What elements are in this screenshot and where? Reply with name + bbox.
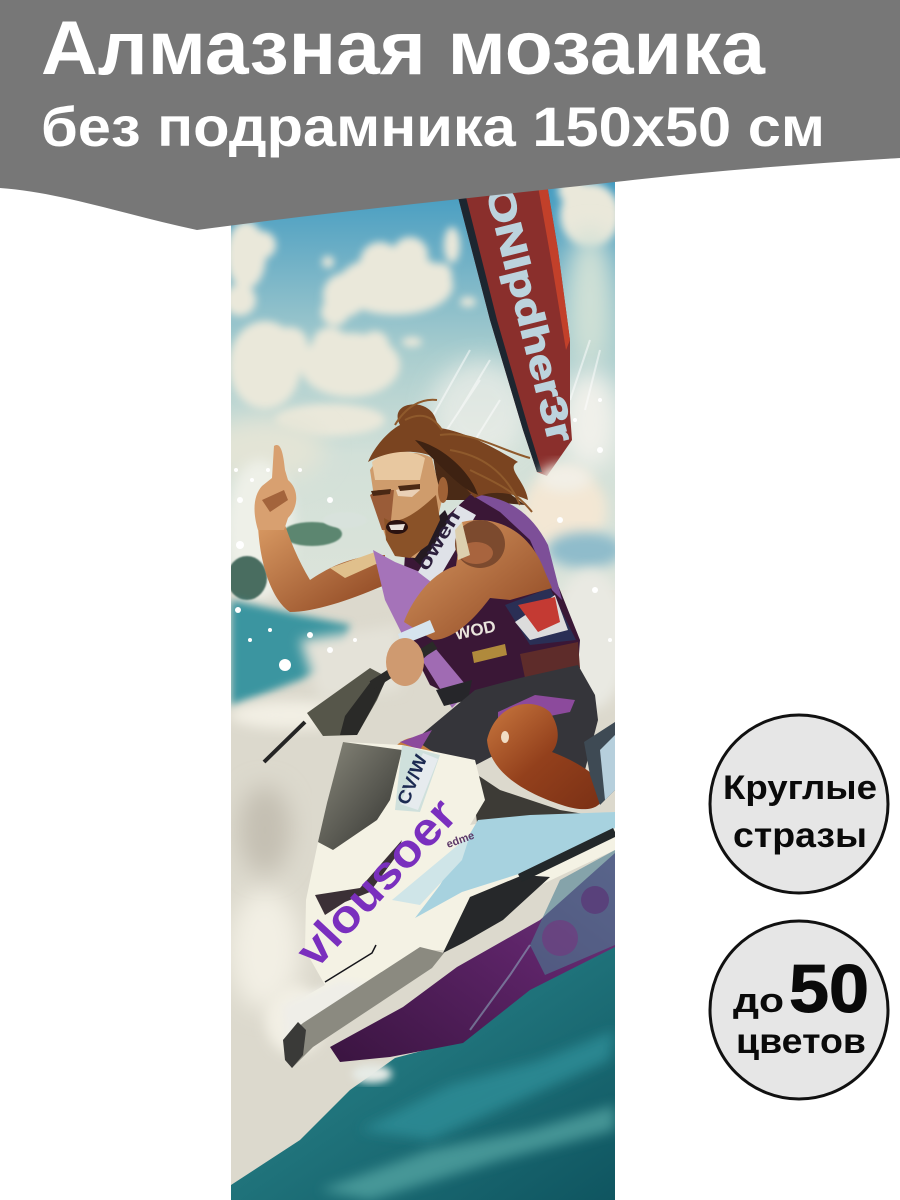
near arm [404, 520, 552, 640]
rear seat [584, 722, 615, 805]
spray over flag foot [539, 464, 591, 492]
shoulder tattoo [455, 520, 505, 568]
hand with pointing finger [255, 445, 296, 530]
grey bumper [283, 947, 444, 1068]
owen strap: owen [413, 507, 465, 575]
pale haze over the sky [231, 412, 324, 477]
badge: up to 50 colours [710, 921, 888, 1099]
subtitle: без подрамника 150х50 см [41, 95, 825, 158]
hull artwork [530, 850, 615, 975]
black side panel [443, 875, 550, 953]
near leg [487, 704, 603, 809]
life vest and torso [373, 494, 580, 708]
vest strap [424, 650, 464, 708]
badge: round rhinestones: стразы [733, 816, 867, 855]
hood outline [325, 945, 376, 982]
foam patches [231, 694, 322, 1054]
title: Алмазная мозаика [41, 6, 766, 91]
badge: up to 50 colours: цветов [736, 1022, 866, 1061]
spray streaks [425, 340, 600, 440]
back hair under head [434, 459, 524, 505]
shoreline trees [231, 521, 343, 601]
rider [255, 400, 603, 809]
owen strap [418, 505, 476, 582]
badge: up to 50 colours: до [733, 982, 784, 1020]
water droplets [234, 398, 612, 671]
jet ski [264, 645, 615, 1068]
hull spray [470, 945, 530, 1030]
badge: CV/W [393, 752, 431, 807]
teal wave on left [231, 600, 350, 706]
beard and mouth [384, 495, 440, 558]
sponsor flag [458, 189, 572, 476]
side deck shadow [476, 776, 580, 822]
sky [231, 170, 615, 610]
hood brand lettering: vlousoer [285, 788, 467, 977]
gunwale rail [520, 832, 615, 878]
life vest and torso: WOD [453, 617, 497, 644]
badge: round rhinestones [710, 715, 888, 893]
shorts [415, 665, 598, 770]
poster artwork: jet ski rider [231, 182, 615, 1200]
far leg [397, 738, 434, 752]
chest logo [505, 588, 576, 645]
clouds [224, 176, 620, 436]
grip hand over bar [386, 638, 424, 686]
dark body [400, 495, 580, 700]
hair [368, 400, 532, 512]
ear [438, 477, 448, 503]
spray beside the rider [523, 470, 607, 550]
purple back panel [470, 494, 562, 600]
skin strip at waist [520, 642, 580, 678]
light blue deck [415, 812, 615, 918]
header banner [0, 0, 900, 230]
windshield [318, 742, 402, 850]
purple hull [330, 853, 615, 1062]
far arm raised [255, 445, 385, 612]
handlebar shroud [307, 668, 387, 736]
mirror arm [264, 722, 305, 762]
handle grip [372, 645, 435, 685]
flag lettering: ONIpdher3r [478, 182, 581, 446]
lower sea [231, 940, 615, 1200]
white upper hull [285, 742, 615, 1040]
console badge panel [395, 745, 440, 812]
small sticker: edme [445, 830, 476, 851]
face [370, 453, 442, 558]
neck [412, 510, 448, 565]
wristband [398, 620, 435, 645]
background spray [430, 360, 620, 470]
badge: up to 50 colours: 50 [789, 951, 869, 1027]
chest purple panel [373, 550, 430, 632]
sea and foam base [231, 590, 615, 1200]
badge: round rhinestones: Круглые [723, 769, 877, 807]
windshield vents [315, 840, 402, 915]
